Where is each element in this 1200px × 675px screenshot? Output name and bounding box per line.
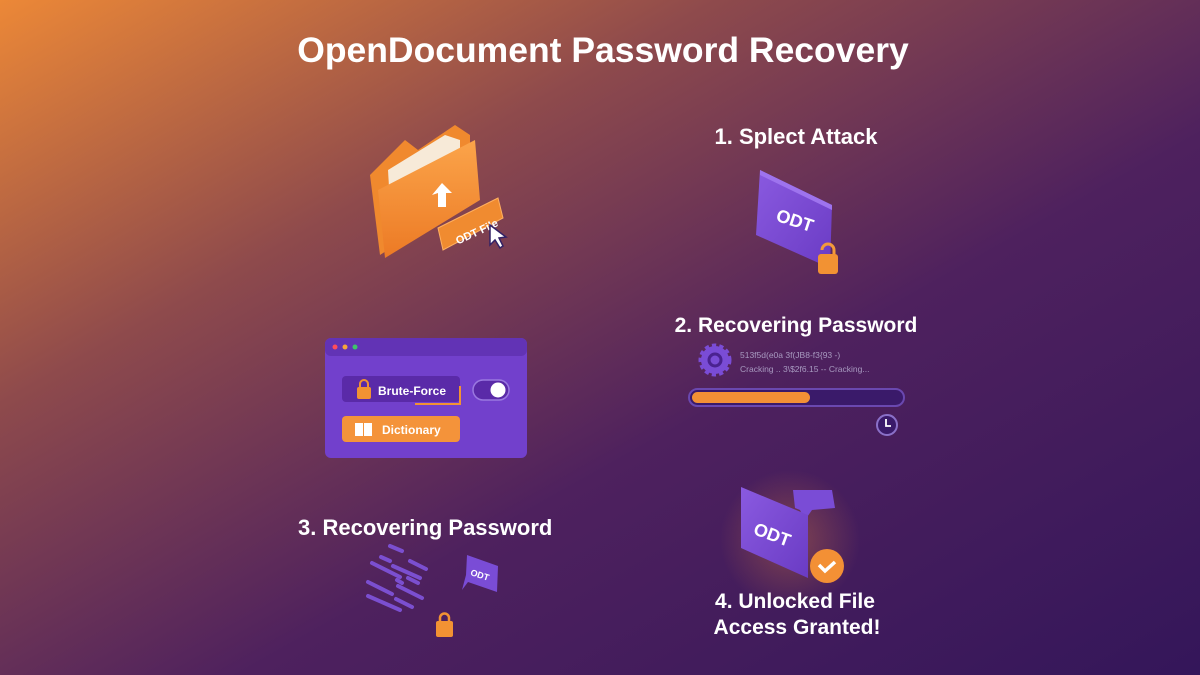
- title: OpenDocument Password Recovery: [297, 30, 909, 70]
- icon: locked ODT card: [756, 170, 838, 274]
- icon: unlocked ODT card: [720, 470, 860, 610]
- icon: locked ODT card: ODT: [774, 205, 816, 236]
- heading: step 3: 3. Recovering Password: [298, 515, 552, 540]
- icon: gear: [701, 346, 729, 374]
- heading: step 2: 2. Recovering Password: [675, 314, 917, 337]
- icon: data streams with ODT bubble and lock: [368, 546, 498, 637]
- button: dictionary: [342, 416, 460, 442]
- progress module: [689, 346, 904, 435]
- progress module: 513f5d(e0a 3f(JB8-f3{93 -): [740, 350, 840, 360]
- icon: folder with ODT file: [370, 125, 506, 258]
- toggle: [473, 380, 509, 400]
- panel: attack options window: [325, 338, 527, 458]
- heading: step 4: [714, 590, 880, 639]
- icon: clock: [877, 415, 897, 435]
- heading: step 4: 4. Unlocked File: [715, 590, 875, 613]
- button: brute-force: Brute-Force: [378, 384, 446, 398]
- icon: data streams with ODT bubble and lock: ODT: [469, 567, 491, 583]
- heading: step 1: 1. Splect Attack: [714, 124, 878, 149]
- icon: unlocked ODT card: ODT: [751, 519, 793, 551]
- progress module: Cracking .. 3\$2f6.15 -- Cracking...: [740, 364, 869, 374]
- heading: step 4: Access Granted!: [714, 616, 880, 639]
- button: brute-force: [342, 376, 460, 404]
- icon: folder with ODT file: ODT File: [454, 217, 500, 247]
- button: dictionary: Dictionary: [382, 423, 441, 437]
